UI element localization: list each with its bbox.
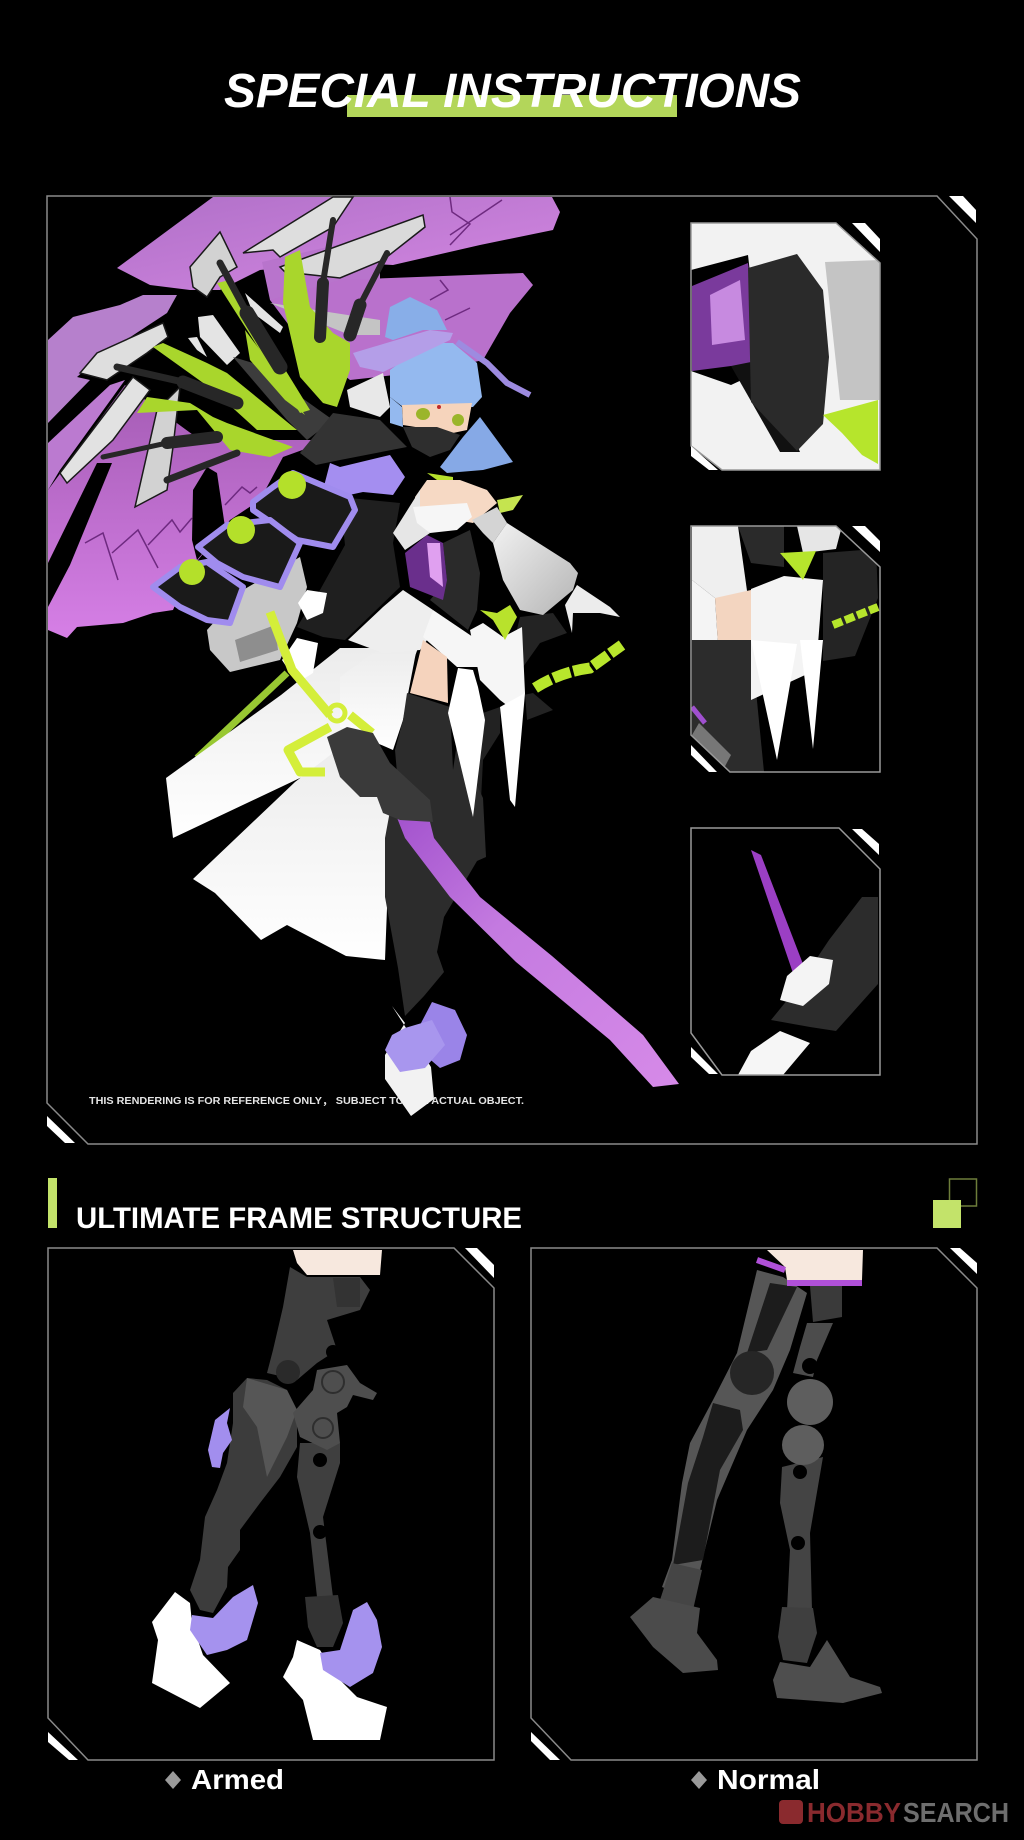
white collar	[347, 373, 390, 417]
chain	[535, 645, 622, 688]
section heading: ULTIMATE FRAME STRUCTURE	[76, 1202, 522, 1235]
panel: main rendering frame	[47, 196, 977, 1144]
back foot	[773, 1607, 882, 1703]
watermark	[779, 1797, 1009, 1828]
holes	[791, 1358, 818, 1550]
torso	[393, 473, 523, 630]
mask	[403, 427, 460, 457]
ponytail	[385, 297, 447, 340]
green rod	[197, 673, 287, 758]
white foot	[385, 1006, 434, 1116]
label: armed: Armed	[191, 1764, 284, 1795]
wing blades	[60, 197, 425, 507]
skin	[767, 1250, 863, 1280]
white gloves	[282, 590, 327, 683]
frame upper	[793, 1323, 833, 1377]
leg shell	[662, 1270, 807, 1600]
black rods	[103, 220, 387, 480]
right boot	[283, 1595, 387, 1740]
knee wheel	[276, 1360, 300, 1384]
frame stem	[297, 1443, 340, 1597]
inset: hip closeup	[691, 526, 880, 772]
front foot	[630, 1563, 718, 1673]
green bumps	[179, 471, 306, 585]
panel: armed leg	[48, 1248, 494, 1760]
purple knee guard	[208, 1408, 232, 1468]
inset: sword hand closeup	[691, 828, 880, 1075]
left boot	[152, 1585, 258, 1708]
yellow guard	[270, 612, 372, 772]
hair	[390, 343, 513, 473]
frame hub	[293, 1365, 377, 1450]
frame column	[810, 1286, 842, 1322]
claws	[448, 605, 525, 817]
skin	[293, 1250, 382, 1275]
watermark: HOBBY	[807, 1797, 901, 1828]
purple bands	[757, 1260, 862, 1283]
green wing arms	[137, 250, 350, 457]
sword blade	[392, 805, 679, 1087]
thigh skin	[410, 640, 448, 703]
shoulder guard	[300, 413, 407, 465]
inset: torso closeup	[691, 223, 880, 470]
dark core	[233, 357, 333, 440]
cape	[166, 647, 418, 960]
guard ring	[329, 705, 345, 721]
thigh column	[333, 1278, 360, 1307]
purple foot armor	[385, 1002, 467, 1072]
thigh	[267, 1267, 370, 1380]
calf armor	[190, 1378, 297, 1613]
dark arm	[297, 497, 400, 640]
skirt frill	[348, 590, 480, 667]
grey wing base	[207, 557, 307, 672]
black leg	[385, 693, 500, 1016]
watermark: SEARCH	[903, 1797, 1009, 1828]
icon: double squares	[933, 1179, 976, 1228]
title: SPECIAL INSTRUCTIONS	[224, 65, 801, 118]
ribbon	[353, 330, 530, 395]
disclaimer: THIS RENDERING IS FOR REFERENCE ONLY， SUBJECT TO THE ACTUAL OBJECT.	[89, 1095, 524, 1107]
figure: winged character with sword	[48, 197, 679, 1116]
holes	[313, 1345, 340, 1539]
sleeve and hand	[472, 507, 620, 633]
wing crack lines	[85, 197, 502, 580]
section accent bar	[48, 1178, 57, 1228]
frame stem	[780, 1457, 823, 1610]
leg inner dark	[673, 1283, 797, 1565]
purple wings	[48, 197, 560, 638]
black gaps	[48, 463, 112, 607]
shoulder armor purple	[323, 455, 405, 497]
center crystals	[188, 293, 380, 365]
label: normal: Normal	[717, 1764, 820, 1795]
knee joint	[730, 1351, 774, 1395]
sword hilt	[327, 727, 433, 822]
face	[402, 403, 472, 433]
armor plates	[153, 473, 355, 623]
panel: normal leg	[531, 1248, 977, 1760]
dark rear piece	[517, 613, 567, 720]
knee facet	[243, 1378, 297, 1477]
frame hubs	[782, 1379, 833, 1465]
